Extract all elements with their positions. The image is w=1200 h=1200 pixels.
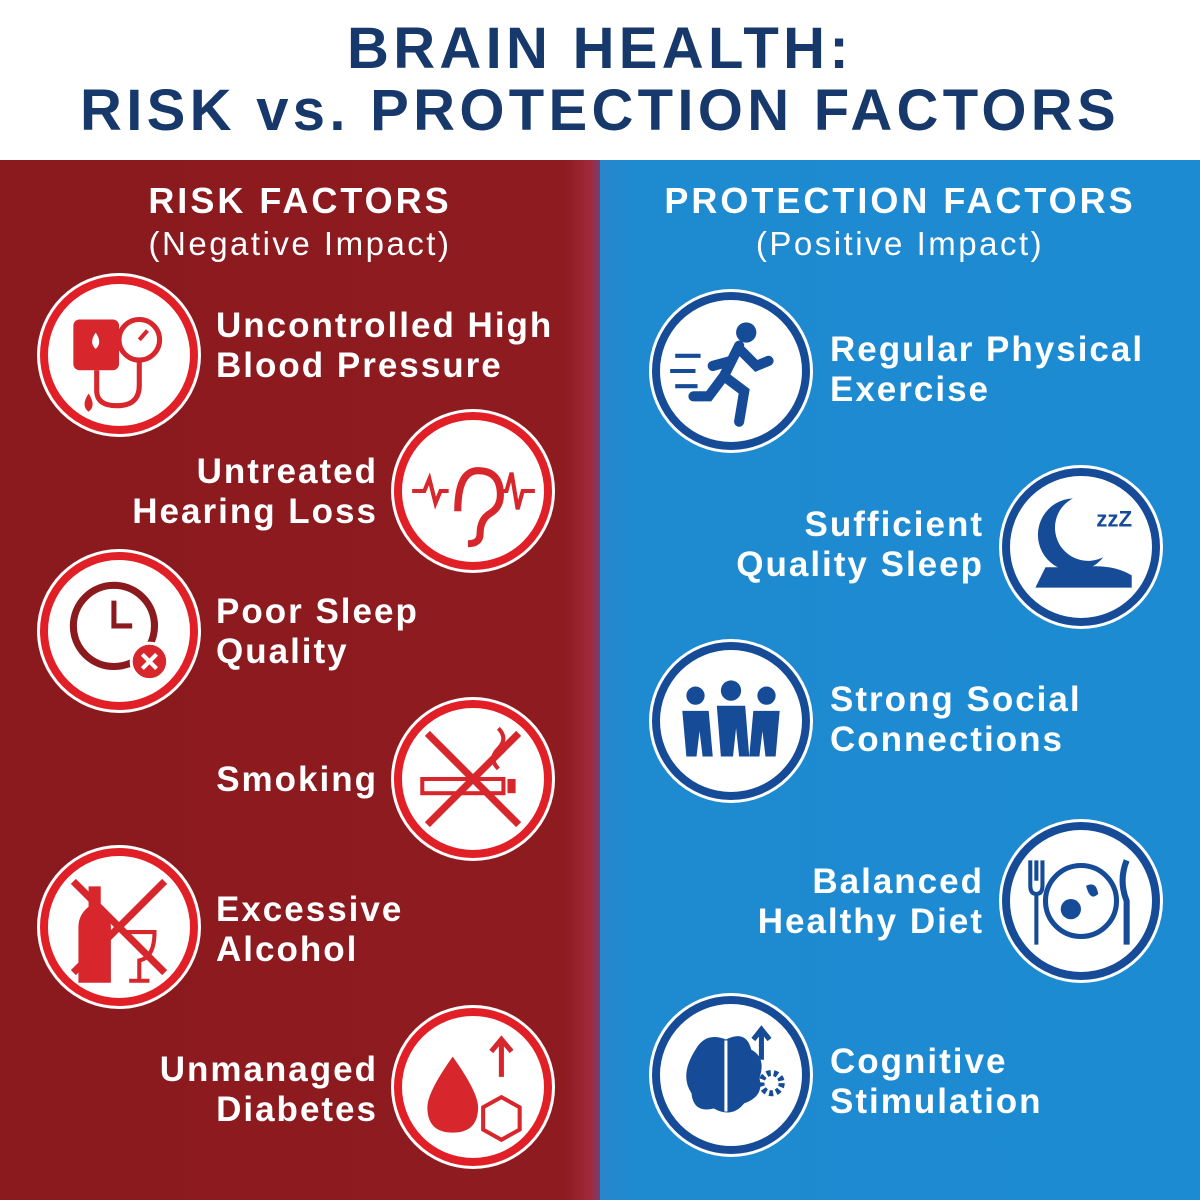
heading: risk	[148, 180, 452, 262]
label: diet	[758, 862, 984, 941]
panel: protection factors	[600, 160, 1200, 1200]
label: diet: Healthy Diet	[758, 902, 984, 941]
title: BRAIN HEALTH:	[347, 16, 853, 81]
icon: diabetes	[394, 1008, 552, 1166]
title: RISK vs. PROTECTION FACTORS	[80, 78, 1120, 143]
heading: protection	[664, 180, 1136, 262]
icon: diet	[1002, 822, 1160, 980]
label: cognitive	[830, 1042, 1043, 1121]
label: diabetes	[160, 1050, 378, 1129]
label: exercise: Regular Physical	[830, 330, 1144, 369]
icon: brain	[652, 996, 810, 1154]
label: smoking: Smoking	[216, 760, 378, 799]
label: social: Strong Social	[830, 680, 1082, 719]
label: blood pressure: Blood Pressure	[216, 346, 503, 385]
label: alcohol	[216, 890, 403, 969]
label: alcohol: Excessive	[216, 890, 403, 929]
icon: running	[652, 292, 810, 450]
heading: risk: RISK FACTORS	[148, 180, 452, 221]
icon: clock	[40, 552, 198, 710]
label: social: Connections	[830, 720, 1064, 759]
label: alcohol: Alcohol	[216, 930, 358, 969]
label: cognitive: Stimulation	[830, 1082, 1043, 1121]
label: sleep	[736, 505, 984, 584]
label: poor sleep: Poor Sleep	[216, 592, 419, 631]
label: poor sleep: Quality	[216, 632, 349, 671]
label: sleep: Sufficient	[805, 505, 984, 544]
label: exercise	[830, 330, 1144, 409]
heading: protection: PROTECTION FACTORS	[664, 180, 1136, 221]
label: hearing loss	[132, 452, 378, 531]
label: hearing loss: Hearing Loss	[132, 492, 378, 531]
label: blood pressure	[216, 306, 553, 385]
icon: blood pressure	[40, 276, 198, 434]
heading: risk: (Negative Impact)	[149, 225, 451, 262]
icon: no smoking	[394, 700, 552, 858]
icon: sleep	[1002, 468, 1160, 626]
panel: risk factors	[0, 160, 600, 1200]
icon: no alcohol	[40, 848, 198, 1006]
label: poor sleep	[216, 592, 419, 671]
label: exercise: Exercise	[830, 370, 990, 409]
label: cognitive: Cognitive	[830, 1042, 1007, 1081]
label: diabetes: Diabetes	[216, 1090, 378, 1129]
icon: sleep: zzZ	[1096, 507, 1132, 532]
heading: protection: (Positive Impact)	[756, 225, 1044, 262]
icon: social	[652, 642, 810, 800]
label: social	[830, 680, 1082, 759]
label: diabetes: Unmanaged	[160, 1050, 378, 1089]
label: diet: Balanced	[812, 862, 984, 901]
label: blood pressure: Uncontrolled High	[216, 306, 553, 345]
label: sleep: Quality Sleep	[736, 545, 984, 584]
label: hearing loss: Untreated	[197, 452, 378, 491]
title	[80, 16, 1120, 143]
icon: ear	[394, 412, 552, 570]
